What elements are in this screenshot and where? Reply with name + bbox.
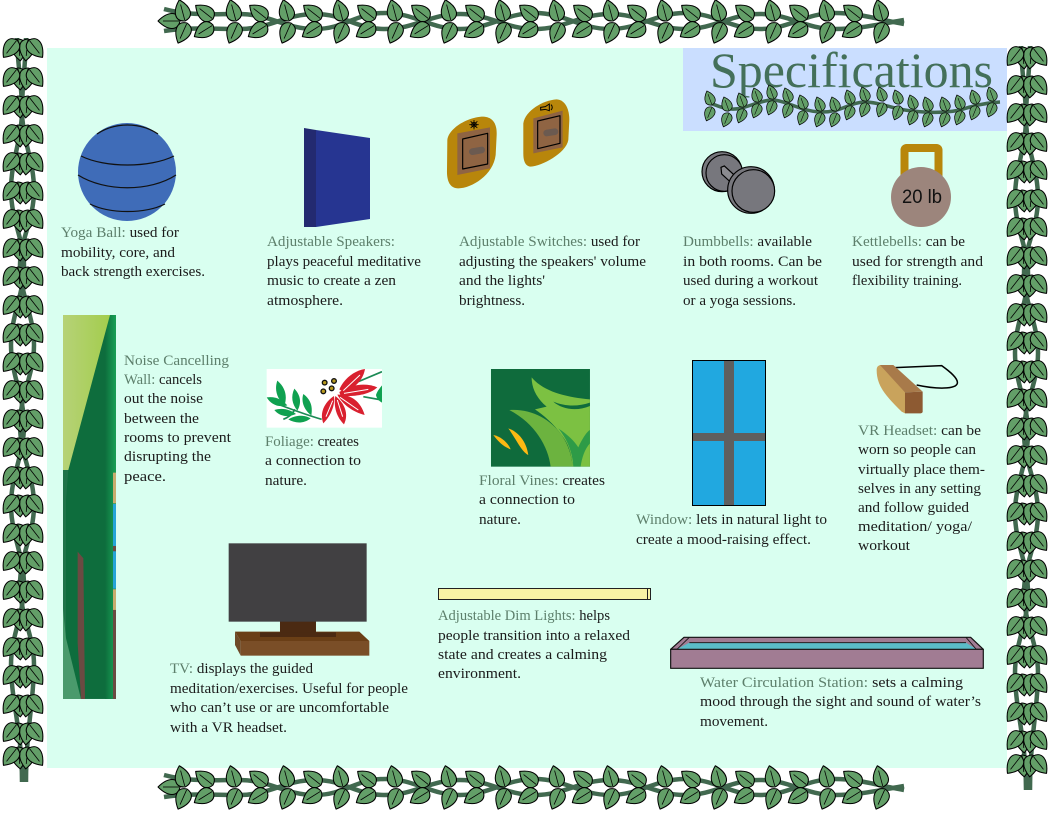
text: window: create a mood-raising effect. xyxy=(636,532,811,548)
item: adjustable speakers xyxy=(267,128,421,309)
text: vr headset: worn so people can xyxy=(858,442,977,458)
text: foliage: a connection to xyxy=(265,453,361,469)
text: yoga ball: Yoga Ball: used for xyxy=(61,225,179,241)
text: yoga ball xyxy=(61,225,205,280)
item: adjustable switches xyxy=(447,99,646,309)
icon: light bar xyxy=(438,588,650,600)
icon: dumbbell xyxy=(702,152,775,213)
item: kettlebells xyxy=(852,148,984,289)
text: wall: between the xyxy=(124,411,199,427)
icon: window xyxy=(692,360,766,506)
text: foliage xyxy=(265,434,361,489)
text: vr headset: virtually place them- xyxy=(858,462,985,478)
text: kettlebells xyxy=(852,234,984,289)
text: water station: mood through the sight and sound of water’s xyxy=(700,694,981,710)
text: floral vines xyxy=(479,473,605,528)
text: tv: who can’t use or are uncomfortable xyxy=(170,700,389,716)
text: speakers: Adjustable Speakers: xyxy=(267,234,395,250)
text: dumbbells: used during a workout xyxy=(683,273,819,289)
text: tv: meditation/exercises. Useful for people xyxy=(170,681,408,697)
text: dumbbells xyxy=(683,234,822,309)
item: floral vines xyxy=(479,369,605,528)
text: vr headset: meditation/ yoga/ xyxy=(858,519,973,535)
text: wall: rooms to prevent xyxy=(124,430,232,446)
text: floral vines: nature. xyxy=(479,512,521,528)
panel: title background xyxy=(683,48,1007,131)
text: speakers: plays peaceful meditative xyxy=(267,254,421,270)
text: kettlebells: used for strength and xyxy=(852,254,984,270)
text: water station xyxy=(700,675,981,730)
text: kettlebells: flexibility training. xyxy=(852,273,962,289)
text: vr headset: VR Headset: can be xyxy=(858,423,981,439)
text: tv: with a VR headset. xyxy=(170,720,287,736)
header vine xyxy=(702,83,1000,129)
item: adjustable dim lights xyxy=(438,588,650,682)
text: vr headset: selves in any setting xyxy=(858,481,982,497)
icon: kettlebell xyxy=(891,148,951,227)
text: wall: peace. xyxy=(124,469,166,485)
title: Specifications xyxy=(710,42,993,98)
left vine border xyxy=(0,35,48,782)
icon: kettlebell: 20 lb xyxy=(902,187,942,208)
item: water circulation station xyxy=(671,637,983,730)
text: dim lights: people transition into a relaxed xyxy=(438,628,631,644)
item: window xyxy=(636,360,827,548)
text: speakers xyxy=(267,234,421,309)
icon: speaker xyxy=(304,128,370,227)
text: window: Window: lets in natural light to xyxy=(636,512,827,528)
text: dim lights: Adjustable Dim Lights: helps xyxy=(438,608,610,624)
icon: vr headset xyxy=(877,365,957,413)
text: wall: Noise Cancelling xyxy=(124,353,229,369)
icon: foliage image xyxy=(267,369,382,428)
text: foliage: nature. xyxy=(265,473,307,489)
text: dumbbells: or a yoga sessions. xyxy=(683,293,796,309)
icon: yoga ball xyxy=(78,123,176,221)
text: vr headset xyxy=(858,423,985,554)
item: noise cancelling wall xyxy=(63,315,232,699)
icon: tv xyxy=(229,543,369,656)
text: switches: Adjustable Switches: used for xyxy=(459,234,640,250)
text: floral vines: a connection to xyxy=(479,492,575,508)
text: dim lights: state and creates a calming xyxy=(438,647,608,663)
item: dumbbells xyxy=(683,152,822,309)
text: dim lights: environment. xyxy=(438,666,521,682)
text: floral vines: Floral Vines: creates xyxy=(479,473,605,489)
text: speakers: atmosphere. xyxy=(267,293,343,309)
text: speakers: music to create a zen xyxy=(267,273,397,289)
text: dumbbells: in both rooms. Can be xyxy=(683,254,822,270)
text: tv: TV: displays the guided xyxy=(170,661,313,677)
text: tv xyxy=(170,661,408,736)
text: wall: out the noise xyxy=(124,391,203,407)
text: water station: movement. xyxy=(700,714,768,730)
text: yoga ball: mobility, core, and xyxy=(61,245,175,261)
text: wall: Wall: cancels xyxy=(124,372,202,388)
text: switches xyxy=(459,234,646,309)
text: yoga ball: back strength exercises. xyxy=(61,264,205,280)
text: dim lights xyxy=(438,608,631,682)
text: wall: disrupting the xyxy=(124,449,211,465)
text: kettlebells: Kettlebells: can be xyxy=(852,234,965,250)
top vine border xyxy=(158,0,904,46)
text: dumbbells: Dumbbells: available xyxy=(683,234,812,250)
icon: wall xyxy=(63,315,116,699)
icon: water trough xyxy=(671,637,983,668)
text: wall xyxy=(124,353,232,485)
text: switches: brightness. xyxy=(459,293,525,309)
text: switches: adjusting the speakers' volume xyxy=(459,254,646,270)
right vine border xyxy=(1002,43,1052,790)
item: vr headset xyxy=(858,365,985,554)
text: vr headset: workout xyxy=(858,538,911,554)
text: water station: Water Circulation Station: sets a calming xyxy=(700,675,964,691)
bottom vine border xyxy=(158,764,904,812)
item: foliage xyxy=(265,369,382,489)
icon: light and volume switches xyxy=(447,99,569,188)
icon: floral image xyxy=(491,369,590,467)
item: tv xyxy=(170,543,408,736)
item: yoga ball xyxy=(61,123,205,280)
text: vr headset: and follow guided xyxy=(858,500,969,516)
text: switches: and the lights' xyxy=(459,273,545,289)
text: foliage: Foliage: creates xyxy=(265,434,359,450)
text: window xyxy=(636,512,827,548)
